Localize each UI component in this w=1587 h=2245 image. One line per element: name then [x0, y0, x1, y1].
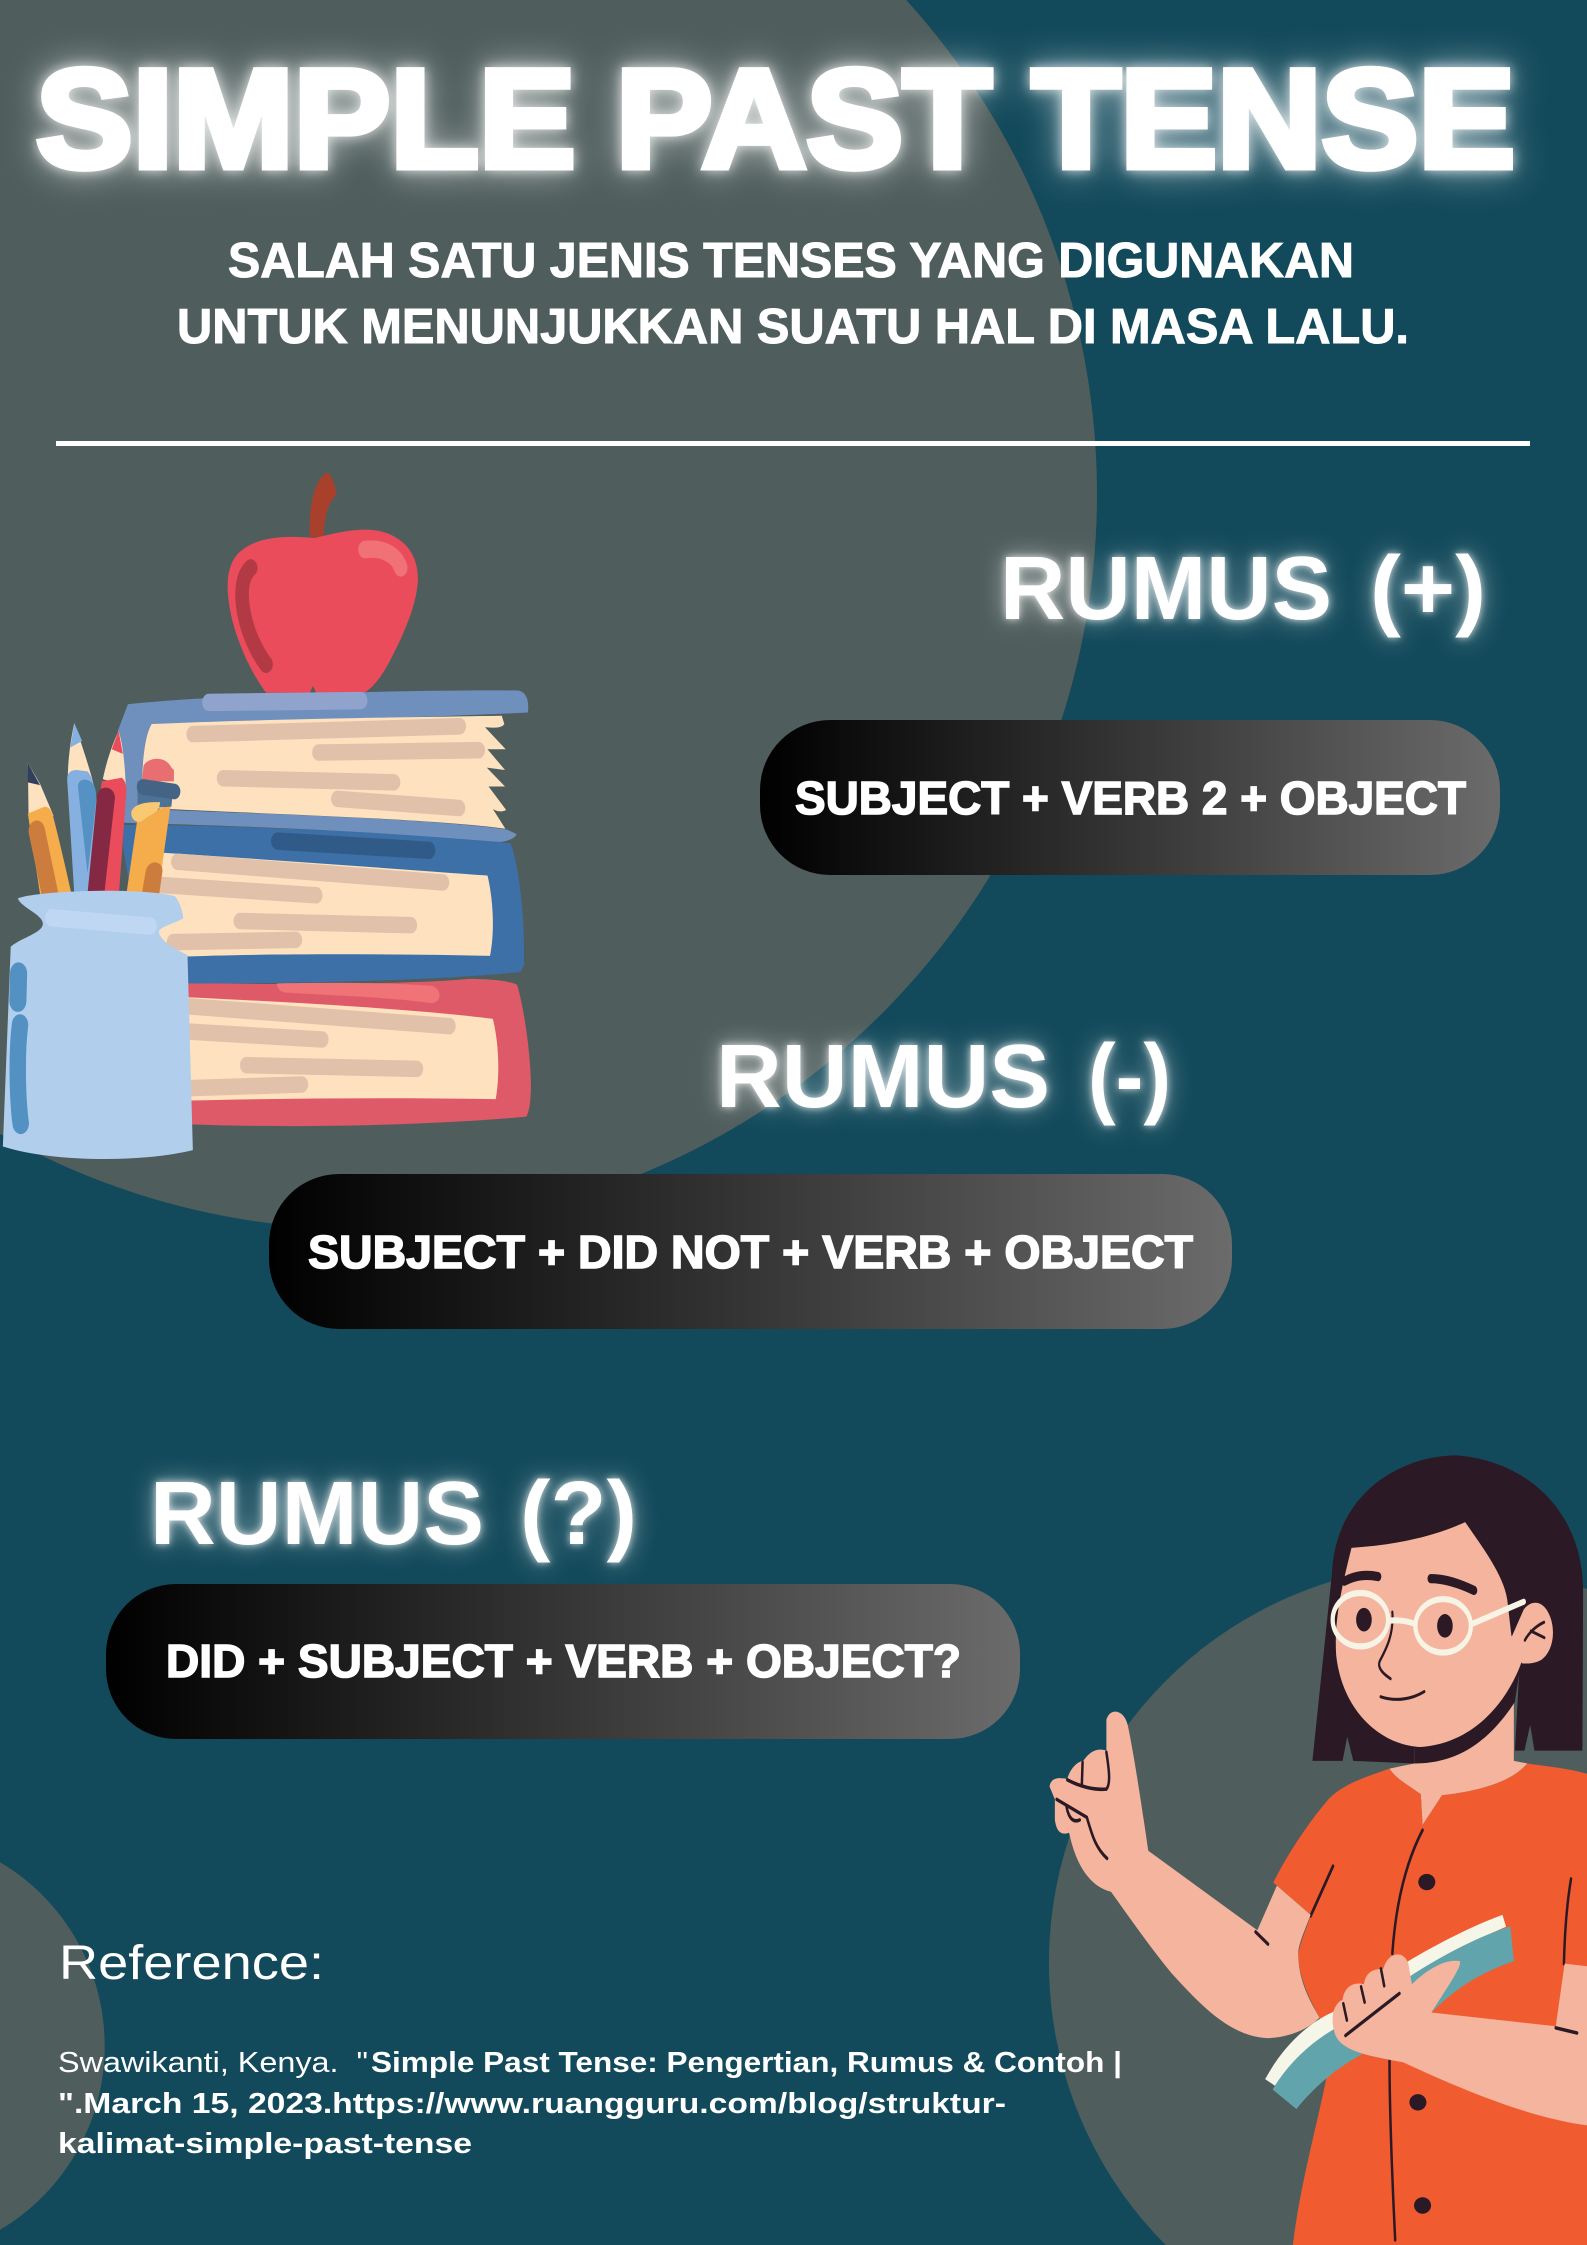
jaw shadow [1414, 1666, 1520, 1763]
reference citation: Swawikanti, Kenya. " [58, 2047, 368, 2079]
reference citation: kalimat-simple-past-tense [58, 2128, 472, 2160]
shirt [1273, 1763, 1587, 2245]
heading: rumus positive: (+) [1370, 539, 1486, 639]
heading: rumus positive: RUMUS [1000, 539, 1332, 639]
raised arm and hand [1050, 1712, 1320, 2038]
heading: rumus question: RUMUS [150, 1464, 484, 1564]
subtitle: UNTUK MENUNJUKKAN SUATU HAL DI MASA LALU. [177, 300, 1409, 354]
face [1336, 1522, 1544, 1747]
illustration: woman pointing and holding a book [1050, 1455, 1587, 2245]
large background circle [0, 0, 1097, 1229]
subtitle: SALAH SATU JENIS TENSES YANG DIGUNAKAN [228, 234, 1354, 288]
subtitle [177, 234, 1409, 354]
glasses [1333, 1593, 1524, 1653]
heading: rumus negative: (-) [1088, 1027, 1171, 1127]
bottom-right background circle [1049, 1564, 1587, 2245]
jar [3, 891, 193, 1159]
ear [1511, 1603, 1553, 1664]
apple [228, 473, 418, 693]
formula pill: positive [760, 720, 1500, 875]
formula pill: positive: SUBJECT + VERB 2 + OBJECT [795, 772, 1466, 824]
formula pill: negative: SUBJECT + DID NOT + VERB + OBJECT [308, 1226, 1193, 1278]
top blue book [118, 690, 528, 842]
reference citation: ".March 15, 2023.https://www.ruangguru.com/blog/struktur- [58, 2088, 1006, 2120]
book held [1265, 1915, 1514, 2109]
middle blue book [123, 825, 524, 983]
title: SIMPLE PAST TENSE [36, 40, 1515, 197]
reference citation [58, 2047, 1122, 2160]
heading: rumus positive [1000, 539, 1486, 639]
formula pill: negative [269, 1174, 1232, 1329]
heading: rumus question: (?) [520, 1464, 637, 1564]
lower arm and hand holding book [1333, 1954, 1587, 2125]
heading: rumus negative: RUMUS [716, 1027, 1050, 1127]
pencils [28, 723, 174, 896]
divider line [56, 441, 1530, 446]
hair [1312, 1455, 1583, 1763]
reference heading: Reference: [59, 1937, 324, 1990]
reference citation: Simple Past Tense: Pengertian, Rumus & Contoh | [371, 2047, 1122, 2079]
formula pill: question: DID + SUBJECT + VERB + OBJECT? [166, 1635, 961, 1687]
neck [1390, 1697, 1527, 1825]
formula pill: question [106, 1584, 1020, 1739]
bottom red book [186, 979, 531, 1126]
heading: rumus question [150, 1464, 637, 1564]
bottom-left background circle [0, 1862, 105, 2230]
illustration: apple on stacked books with pencil jar [3, 473, 531, 1159]
